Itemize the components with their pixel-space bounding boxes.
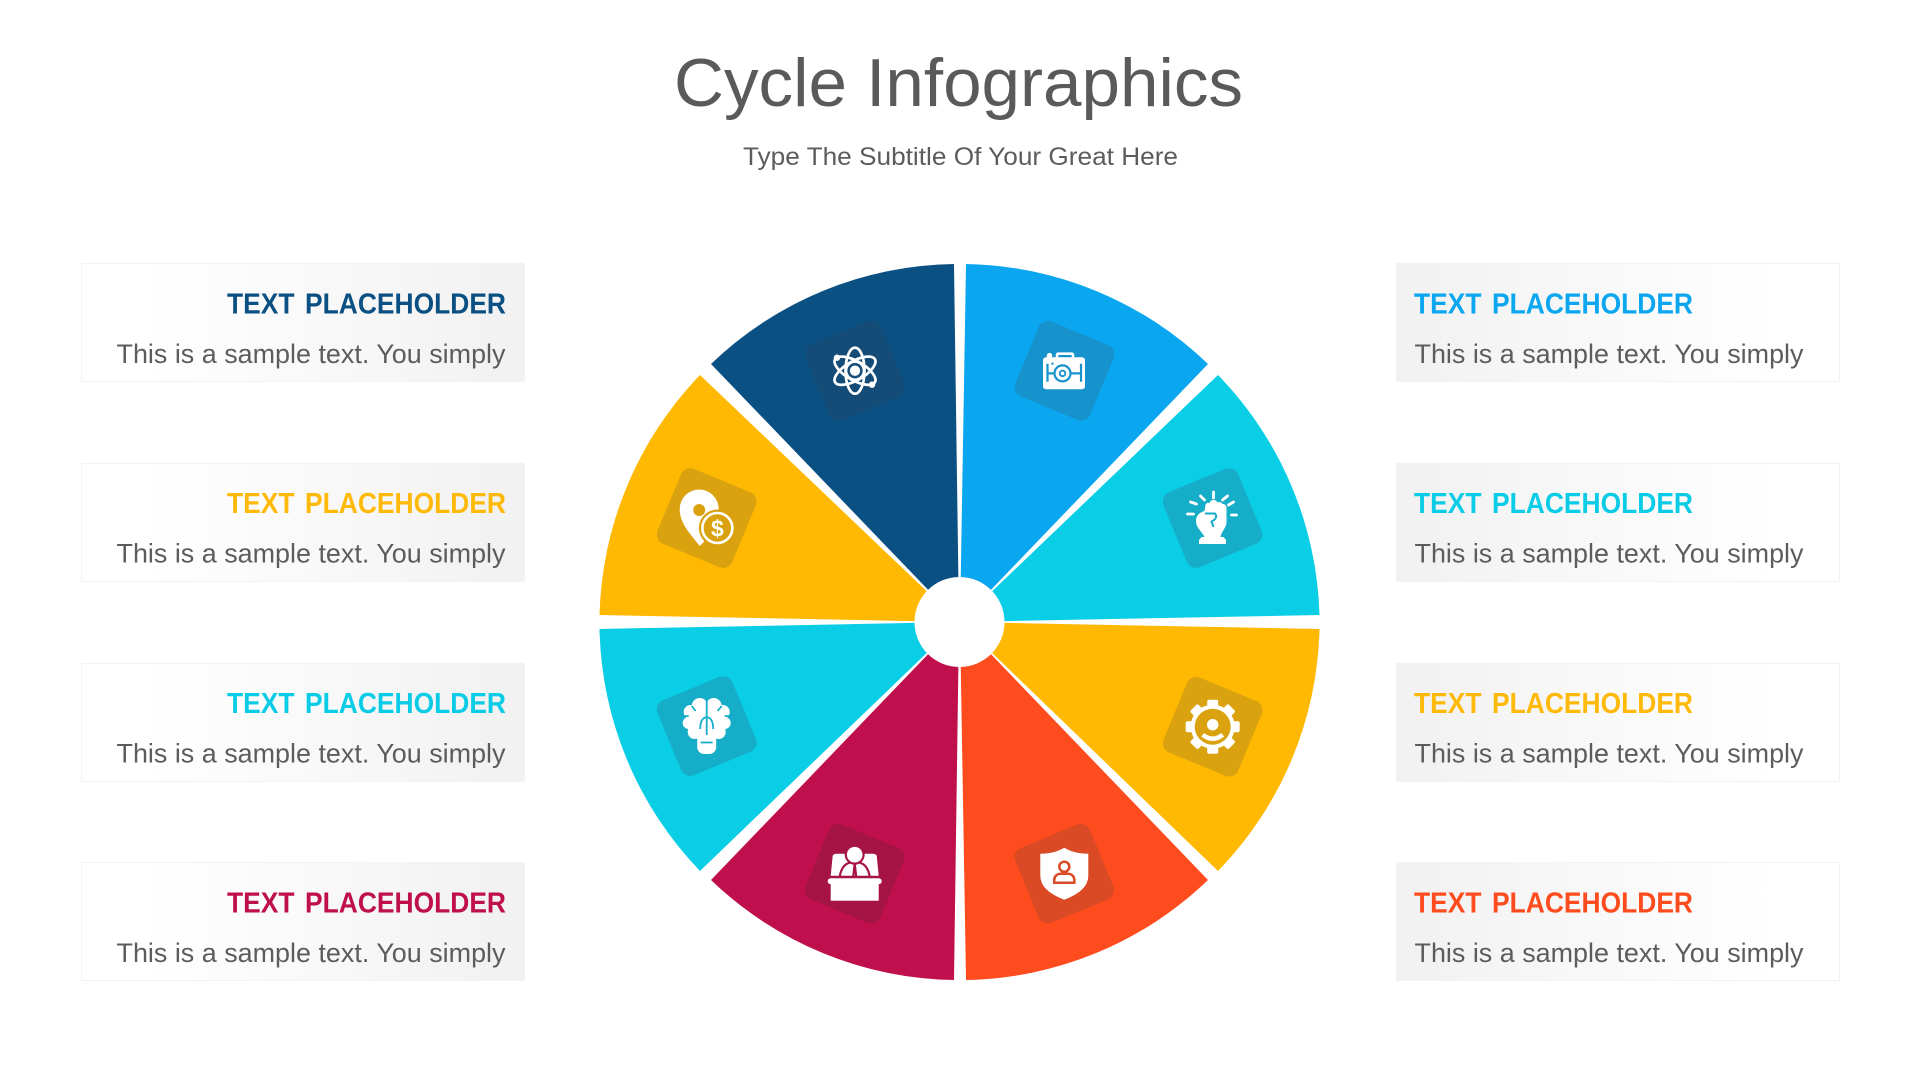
icon: pin with dollar <box>654 465 760 571</box>
panel: left 3 cyan: This is a sample text. You simply <box>116 738 506 768</box>
panel: left 1 navy: This is a sample text. You simply <box>116 339 506 369</box>
icon: podium speaker <box>802 821 908 927</box>
panel: right 4 red: TEXT PLACEHOLDER <box>1414 888 1693 920</box>
panel: right 1 blue <box>1396 264 1840 382</box>
panel: left 2 yellow: This is a sample text. You simply <box>116 539 506 569</box>
cycle wheel <box>600 264 1320 980</box>
wedge: red <box>960 622 1208 980</box>
panel: right 3 yellow <box>1396 664 1840 782</box>
panel: left 1 navy <box>82 264 524 382</box>
panel: left 4 crimson: This is a sample text. You simply <box>116 938 506 968</box>
icon: fist <box>1160 465 1265 571</box>
panel: left 4 crimson <box>82 862 524 980</box>
icon: pin with dollar: $ <box>711 516 724 542</box>
title: Cycle Infographics <box>674 46 1243 121</box>
panel: right 1 blue: This is a sample text. You simply <box>1414 339 1804 369</box>
panel: right 1 blue: TEXT PLACEHOLDER <box>1414 288 1693 320</box>
subtitle: Type The Subtitle Of Your Great Here <box>743 143 1178 171</box>
panel: left 2 yellow: TEXT PLACEHOLDER <box>227 488 506 520</box>
panel: left 1 navy: TEXT PLACEHOLDER <box>227 288 506 320</box>
wedge: yellow left <box>600 375 959 622</box>
center hub <box>914 577 1004 667</box>
icon: camera <box>1012 318 1117 424</box>
panel: left 2 yellow <box>82 464 524 582</box>
wedge: cyan left <box>600 622 959 871</box>
panel: right 3 yellow: TEXT PLACEHOLDER <box>1414 688 1693 720</box>
icon: shield person <box>1011 821 1117 927</box>
panel: right 4 red: This is a sample text. You simply <box>1414 938 1804 968</box>
panel: right 2 cyan <box>1396 464 1840 582</box>
panel: left 3 cyan <box>82 664 524 782</box>
wedge: blue <box>960 264 1208 622</box>
panel: right 3 yellow: This is a sample text. You simply <box>1414 738 1804 768</box>
icon: gear person <box>1160 674 1266 780</box>
panel: left 4 crimson: TEXT PLACEHOLDER <box>227 888 506 920</box>
panel: right 2 cyan: TEXT PLACEHOLDER <box>1414 488 1693 520</box>
icon: atom <box>802 318 908 424</box>
panel: right 4 red <box>1396 862 1840 980</box>
wedge: crimson <box>711 622 959 980</box>
wedge: yellow right <box>960 622 1320 871</box>
wedge: cyan right <box>960 375 1320 622</box>
panel: right 2 cyan: This is a sample text. You simply <box>1414 539 1804 569</box>
wedge: navy <box>711 264 959 622</box>
icon: brain bulb <box>654 673 760 779</box>
panel: left 3 cyan: TEXT PLACEHOLDER <box>227 688 506 720</box>
